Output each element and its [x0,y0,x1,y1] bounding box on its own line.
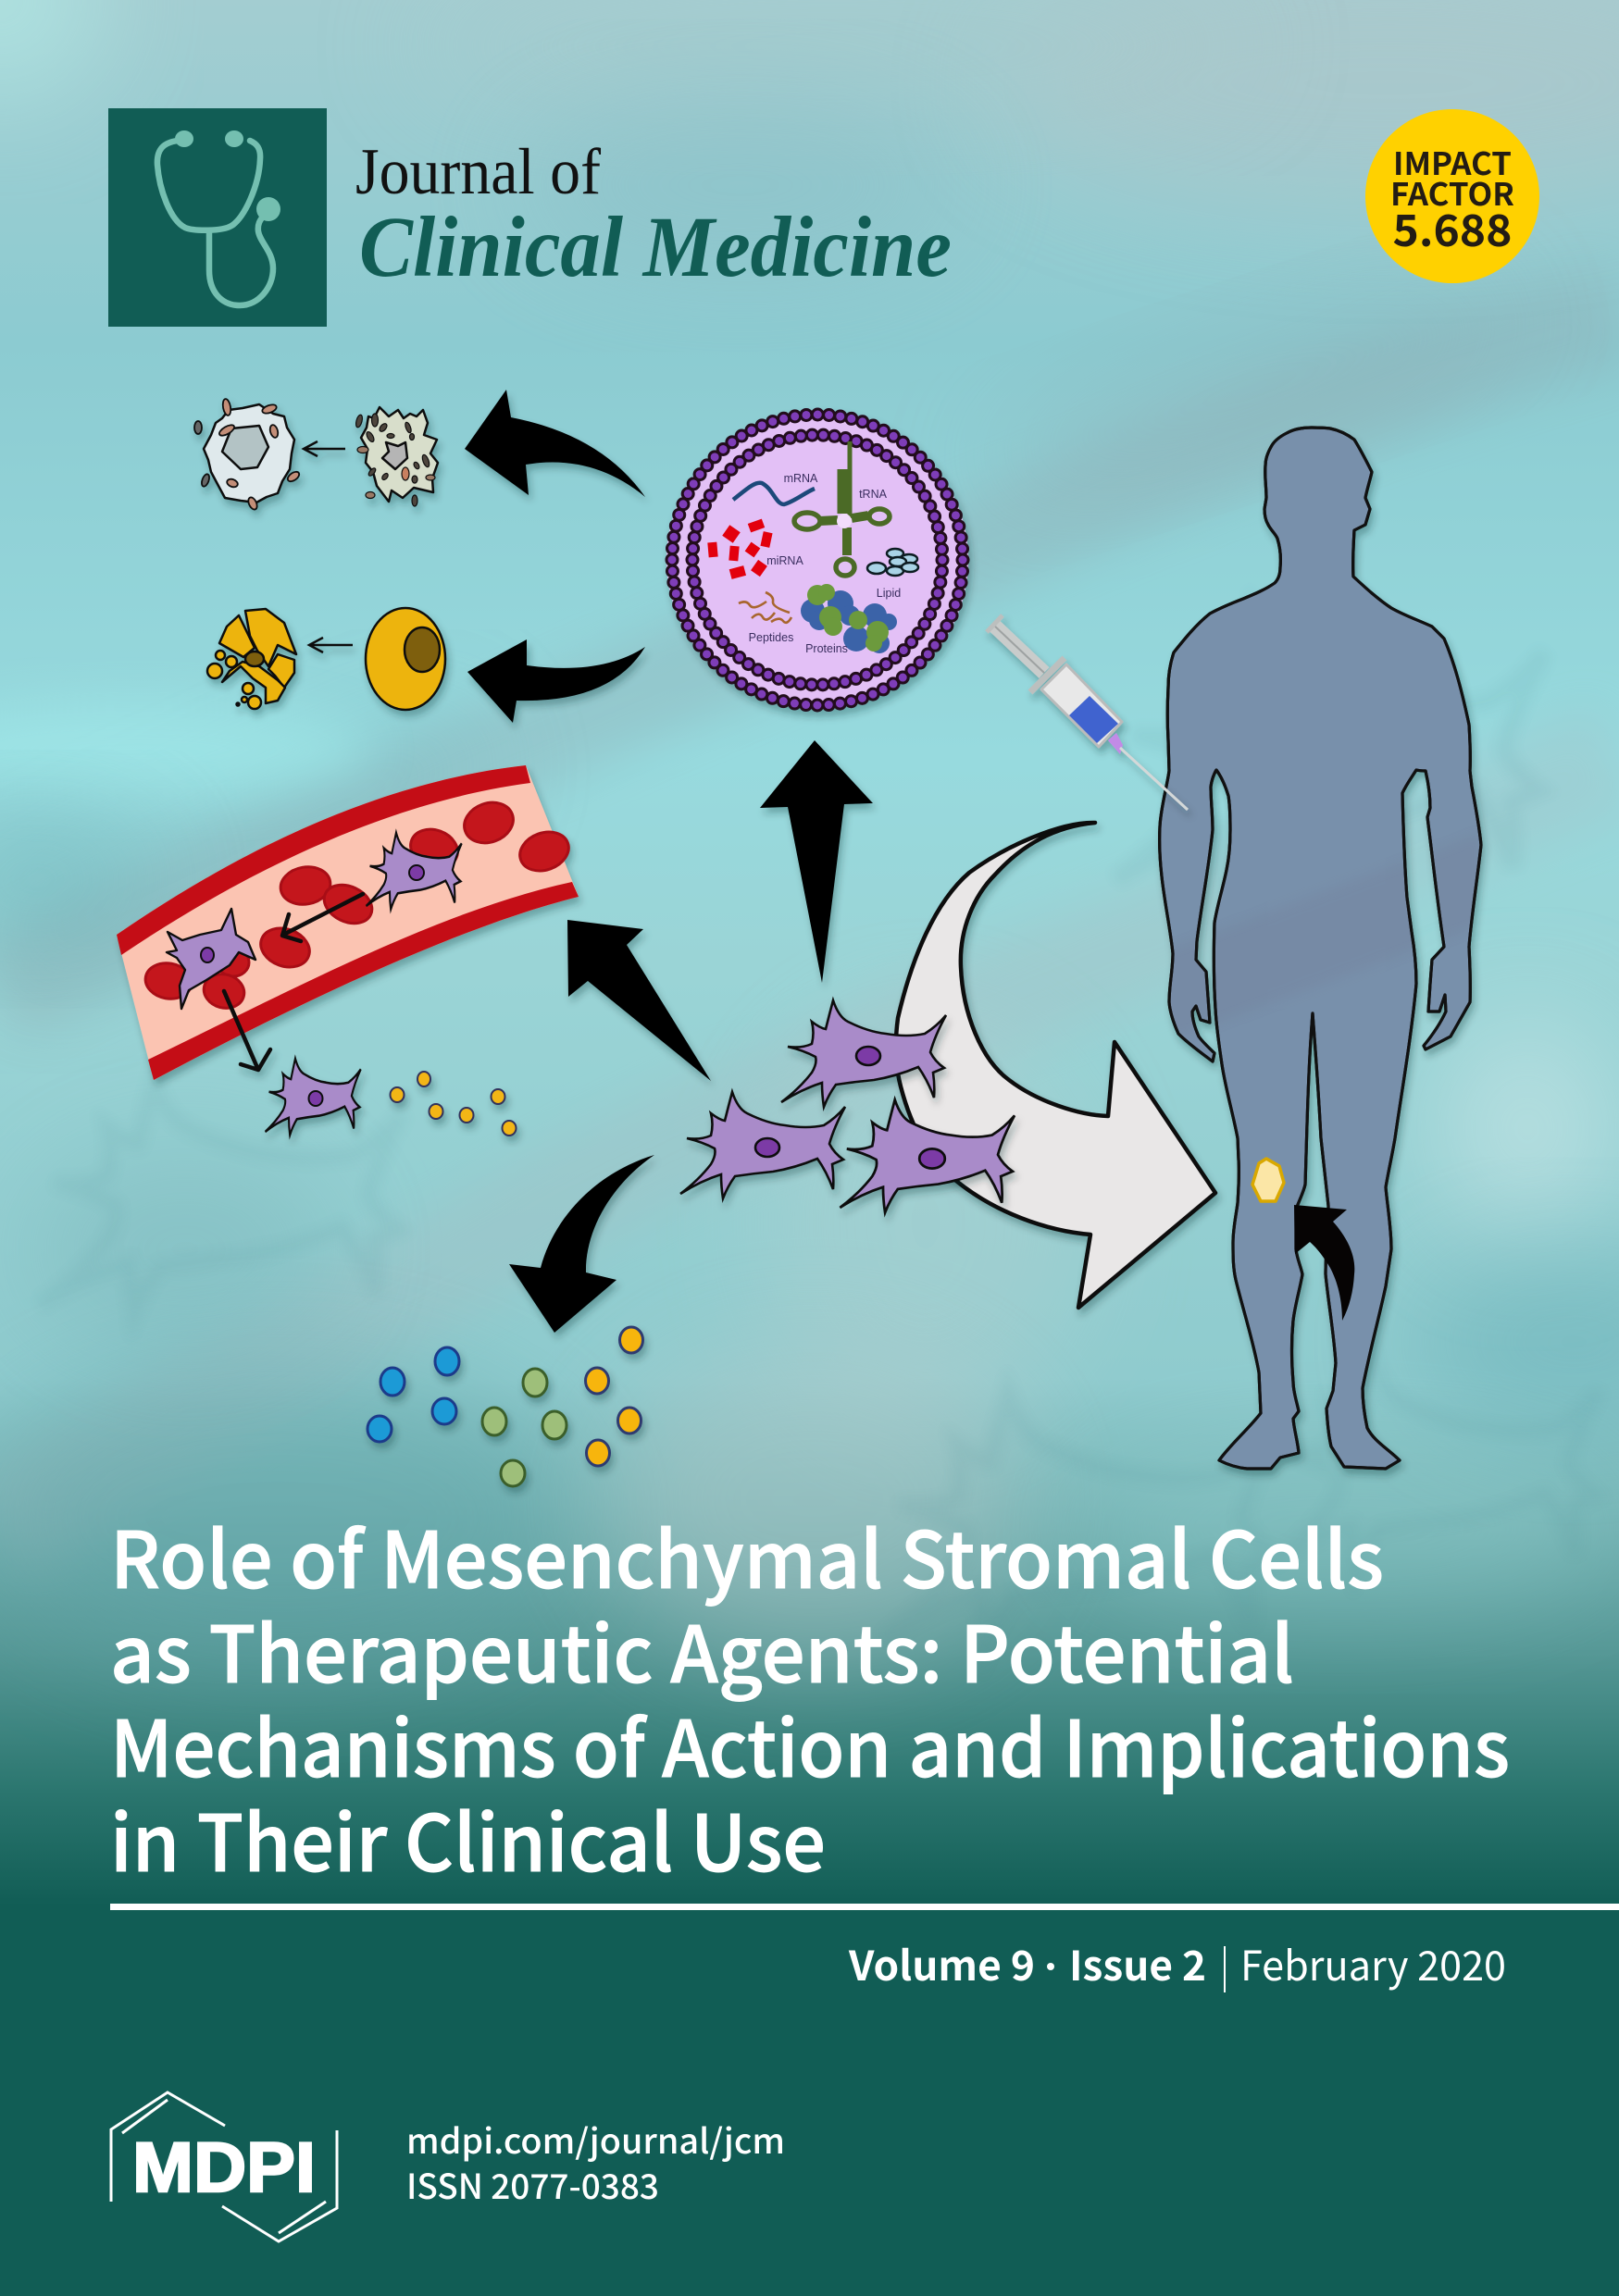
cell: stromal lower right [840,1099,1015,1212]
nucleus [309,1091,322,1106]
membrane: outer bead ring [672,415,963,705]
arrows from cell cluster [509,740,873,1333]
illustration: apoptosis and cell outcomes [194,390,645,723]
vesicle labels: Peptides [749,631,793,644]
extravasated cell with released particles [265,1059,517,1136]
arrow: toward injury [1294,1205,1354,1321]
publisher logo: MDPI [111,2092,337,2241]
journal name line 2: Clinical Medicine [359,200,952,295]
orange factors [585,1327,642,1466]
ISSN: ISSN 2077-0383 [406,2159,659,2209]
logo square [108,108,327,327]
vesicle labels [749,472,901,655]
tRNA [794,441,890,576]
peptides [739,592,791,623]
publisher logo: MDPI: MDPI [132,2128,316,2207]
vessel wall bottom [148,882,579,1080]
volume: Volume 9 [848,1933,1035,1992]
date: February 2020 [1240,1933,1506,1992]
secreted factors [367,1327,642,1486]
separator [1224,1946,1226,1992]
human body silhouette [1157,428,1481,1469]
arrow: small thin [304,441,345,456]
icon: stethoscope [157,130,280,305]
journal links [406,2114,785,2209]
vessel wall top [117,765,530,955]
journal name line 1: Journal of [355,136,601,208]
particles [391,1072,517,1136]
mRNA strand [733,483,815,504]
journal logo [108,108,327,327]
cell: damaged spiky cell [355,407,438,506]
blood vessel [117,765,579,1080]
arrow: up to vesicle [760,740,873,983]
article title [110,1499,1510,1894]
cell: migrating in vessel lower [167,909,255,1009]
injury site [1252,1159,1284,1201]
membrane: inner bead ring [692,435,942,685]
cell: extravasated [265,1059,361,1136]
arrow: white curved arrow to body [896,823,1215,1308]
arrow: to vessel [567,920,711,1081]
web address: mdpi.com/journal/jcm [406,2114,785,2164]
journal name [355,136,952,295]
nucleus [409,865,424,880]
cell: migrating in vessel upper [366,833,462,910]
vesicle labels: tRNA [859,488,888,501]
vesicle labels: miRNA [766,554,803,567]
mesenchymal stromal cell cluster [680,1000,1015,1212]
cell: stromal upper [781,1000,946,1107]
vesicle labels: mRNA [784,472,818,485]
article title: in Their Clinical Use [110,1782,826,1894]
cell: yellow cell with nucleus [366,608,445,710]
lipid droplets [867,549,918,576]
impact factor badge [1365,109,1539,283]
article title: Mechanisms of Action and Implications [110,1688,1510,1800]
arrows within vessel [224,894,363,1070]
miRNA fragments [707,519,773,579]
vesicle labels: Lipid [877,587,901,600]
green factors [482,1369,567,1486]
issue: Issue 2 [1069,1933,1206,1992]
cell: healthy pale cell [194,398,301,511]
arrow: small thin [309,638,353,652]
article title: as Therapeutic Agents: Potential [110,1594,1294,1706]
syringe [987,615,1188,810]
cell: broken yellow cell [207,609,296,709]
proteins [801,584,897,653]
blue factors [367,1347,459,1442]
impact factor badge: IMPACT [1393,139,1512,184]
title rule [110,1904,1619,1910]
dot [1047,1963,1054,1970]
article title: Role of Mesenchymal Stromal Cells [110,1499,1384,1611]
arrow: to pale cells [465,390,645,497]
vesicle labels: Proteins [805,642,848,655]
issue information [848,1933,1506,1992]
impact factor badge: FACTOR [1390,169,1514,215]
arrow: curved to secreted factors [509,1155,654,1333]
impact factor badge: 5.688 [1392,195,1513,259]
vesicle [666,412,968,708]
cell: stromal lower left [680,1092,845,1198]
arrow: to yellow cells [467,639,645,723]
red blood cells [143,796,574,1012]
